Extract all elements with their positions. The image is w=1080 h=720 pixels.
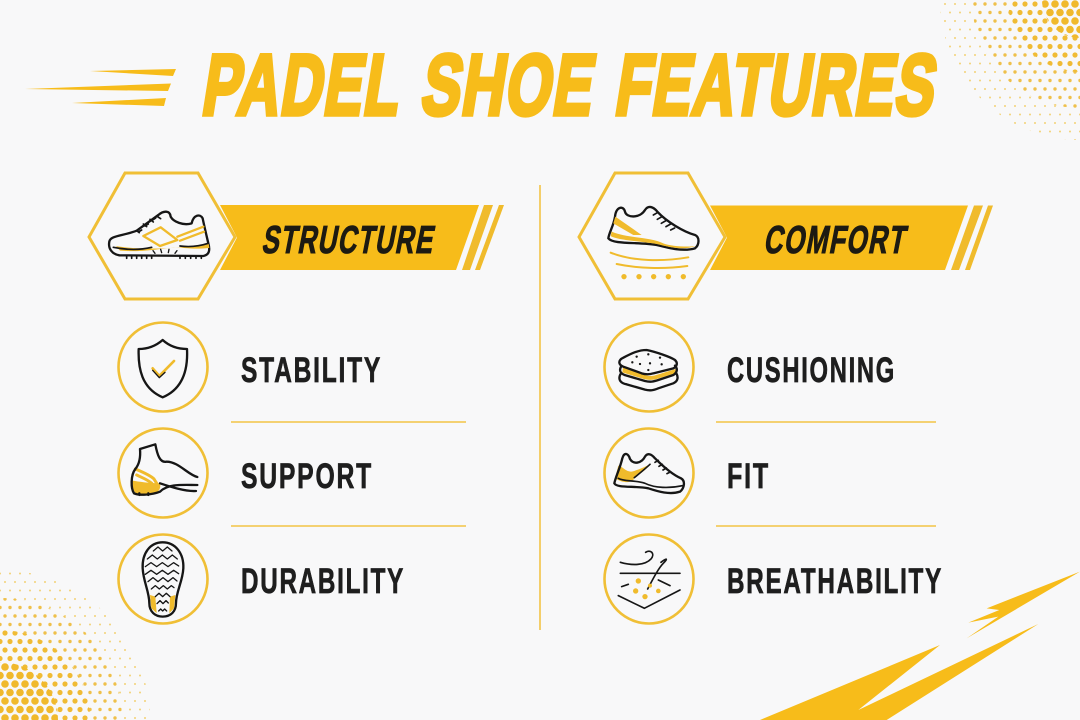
structure header banner: STRUCTURE	[259, 218, 440, 262]
panel: structure	[89, 173, 504, 624]
divider line	[716, 525, 936, 527]
divider line	[231, 525, 466, 527]
lightning bolts: bottom right	[760, 572, 1080, 720]
panel: comfort	[579, 173, 993, 624]
item: cushioning	[604, 322, 896, 412]
item: breathability	[604, 534, 943, 624]
halftone: bottom left corner	[0, 572, 150, 720]
title: PADEL	[197, 38, 410, 133]
item: stability	[118, 322, 382, 412]
item: fit: FIT	[727, 457, 770, 496]
halftone: top right corner	[940, 0, 1080, 140]
structure hexagon icon: shoe	[89, 173, 235, 299]
comfort hexagon icon: cushioned shoe	[579, 173, 725, 299]
item: breathability: BREATHABILITY	[727, 562, 943, 601]
item: support	[118, 428, 373, 518]
divider line	[716, 421, 936, 423]
item: durability	[118, 534, 405, 624]
comfort header banner	[710, 206, 993, 270]
structure header banner	[220, 205, 504, 270]
comfort header banner: COMFORT	[761, 218, 912, 262]
item: support: SUPPORT	[241, 457, 373, 496]
item: fit	[604, 428, 770, 518]
item: durability: DURABILITY	[241, 562, 405, 601]
item: stability: STABILITY	[241, 351, 382, 390]
title	[197, 38, 945, 133]
vertical divider	[539, 185, 541, 630]
title: SHOE	[416, 38, 603, 133]
item: cushioning: CUSHIONING	[727, 351, 896, 390]
speed lines beside title	[25, 69, 176, 106]
divider line	[231, 421, 466, 423]
